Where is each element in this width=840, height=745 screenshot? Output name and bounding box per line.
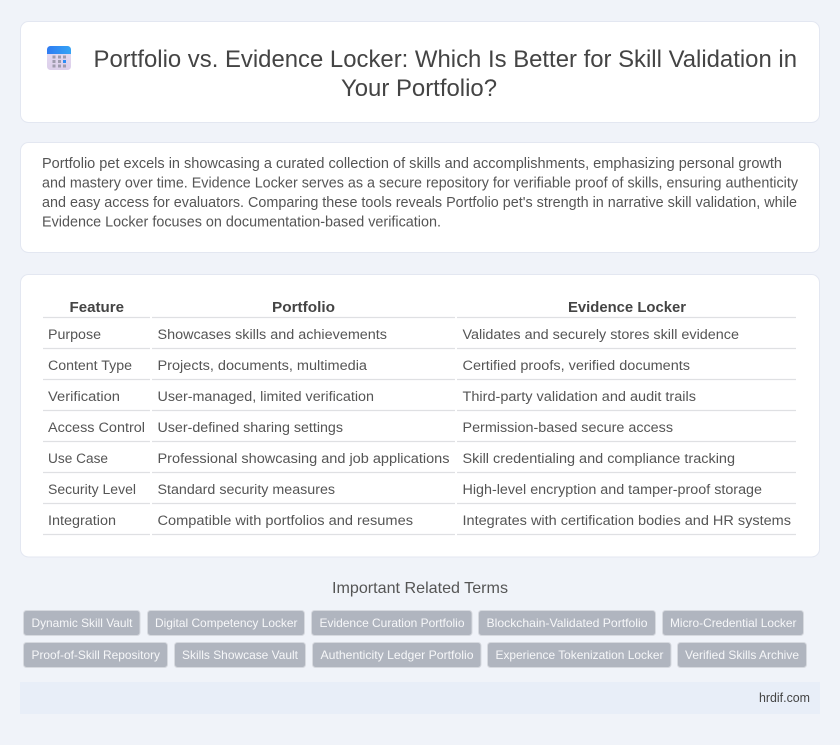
text block: intro: and easy access for evaluators. Comparing these tools reveals Portfolio pet's strength in narrative skill validation, while <box>42 195 797 211</box>
table header row: Portfolio <box>272 300 335 316</box>
row: security level: Security Level <box>48 482 136 498</box>
row: access control <box>48 420 673 436</box>
row: verification <box>48 389 696 405</box>
row: verification: User-managed, limited verification <box>158 389 374 405</box>
tags: related terms: Skills Showcase Vault <box>182 648 299 662</box>
row: use case: Skill credentialing and compliance tracking <box>462 451 735 467</box>
title: Portfolio vs. Evidence Locker: Which Is Better for Skill Validation in <box>94 46 797 73</box>
row: purpose: Validates and securely stores skill evidence <box>462 327 739 343</box>
row: verification: Third-party validation and audit trails <box>462 389 696 405</box>
row: integration: Compatible with portfolios and resumes <box>158 513 413 529</box>
row: purpose: Purpose <box>48 327 101 343</box>
row: purpose <box>48 327 739 343</box>
tags: related terms: Authenticity Ledger Portfolio <box>320 648 474 662</box>
text block: intro: Portfolio pet excels in showcasing a curated collection of skills and accomplishments, emphasizing personal growth <box>42 156 782 172</box>
row: security level <box>48 482 762 498</box>
table header row: Evidence Locker <box>568 300 686 316</box>
tags: related terms: Evidence Curation Portfolio <box>320 616 465 630</box>
row: integration <box>48 513 791 529</box>
panel: comparison table <box>20 274 820 557</box>
row: use case <box>48 451 735 467</box>
icon: calendar <box>47 46 71 70</box>
row: integration: Integration <box>48 513 116 529</box>
row: access control: Access Control <box>48 420 145 436</box>
row: integration: Integrates with certification bodies and HR systems <box>462 513 791 529</box>
row: use case: Professional showcasing and job applications <box>158 451 450 467</box>
tags: related terms: Micro-Credential Locker <box>670 616 796 630</box>
tags: related terms: Proof-of-Skill Repository <box>32 648 160 662</box>
heading: important related terms: Important Related Terms <box>332 580 508 597</box>
panel: intro paragraph <box>20 142 820 252</box>
title <box>94 46 797 102</box>
row: content type: Content Type <box>48 358 132 374</box>
tags: related terms <box>24 610 806 668</box>
tags: related terms: Digital Competency Locker <box>155 616 298 630</box>
row: security level: High-level encryption and tamper-proof storage <box>462 482 762 498</box>
row: access control: Permission-based secure access <box>462 420 673 436</box>
footer <box>20 682 820 714</box>
text block: intro: and mastery over time. Evidence Locker serves as a secure repository for verifiable proof of skills, ensuring authenticity <box>42 176 799 192</box>
footer: hrdif.com <box>759 690 810 705</box>
panel: title header <box>20 22 820 122</box>
row: purpose: Showcases skills and achievements <box>158 327 387 343</box>
tags: related terms: Dynamic Skill Vault <box>32 616 133 630</box>
table header row <box>70 300 686 316</box>
tags: related terms: Experience Tokenization Locker <box>496 648 664 662</box>
row: security level: Standard security measures <box>158 482 335 498</box>
text block: intro <box>42 156 799 230</box>
row: content type <box>48 358 690 374</box>
tags: related terms: Verified Skills Archive <box>685 648 799 662</box>
title: Your Portfolio? <box>341 75 497 102</box>
row: content type: Projects, documents, multimedia <box>158 358 367 374</box>
row: use case: Use Case <box>48 451 108 467</box>
table header row: Feature <box>70 300 124 316</box>
tags: related terms: Blockchain-Validated Portfolio <box>486 616 648 630</box>
row: verification: Verification <box>48 389 120 405</box>
text block: intro: Evidence Locker focuses on documentation-based verification. <box>42 214 441 230</box>
row: content type: Certified proofs, verified documents <box>462 358 690 374</box>
row: access control: User-defined sharing settings <box>158 420 343 436</box>
